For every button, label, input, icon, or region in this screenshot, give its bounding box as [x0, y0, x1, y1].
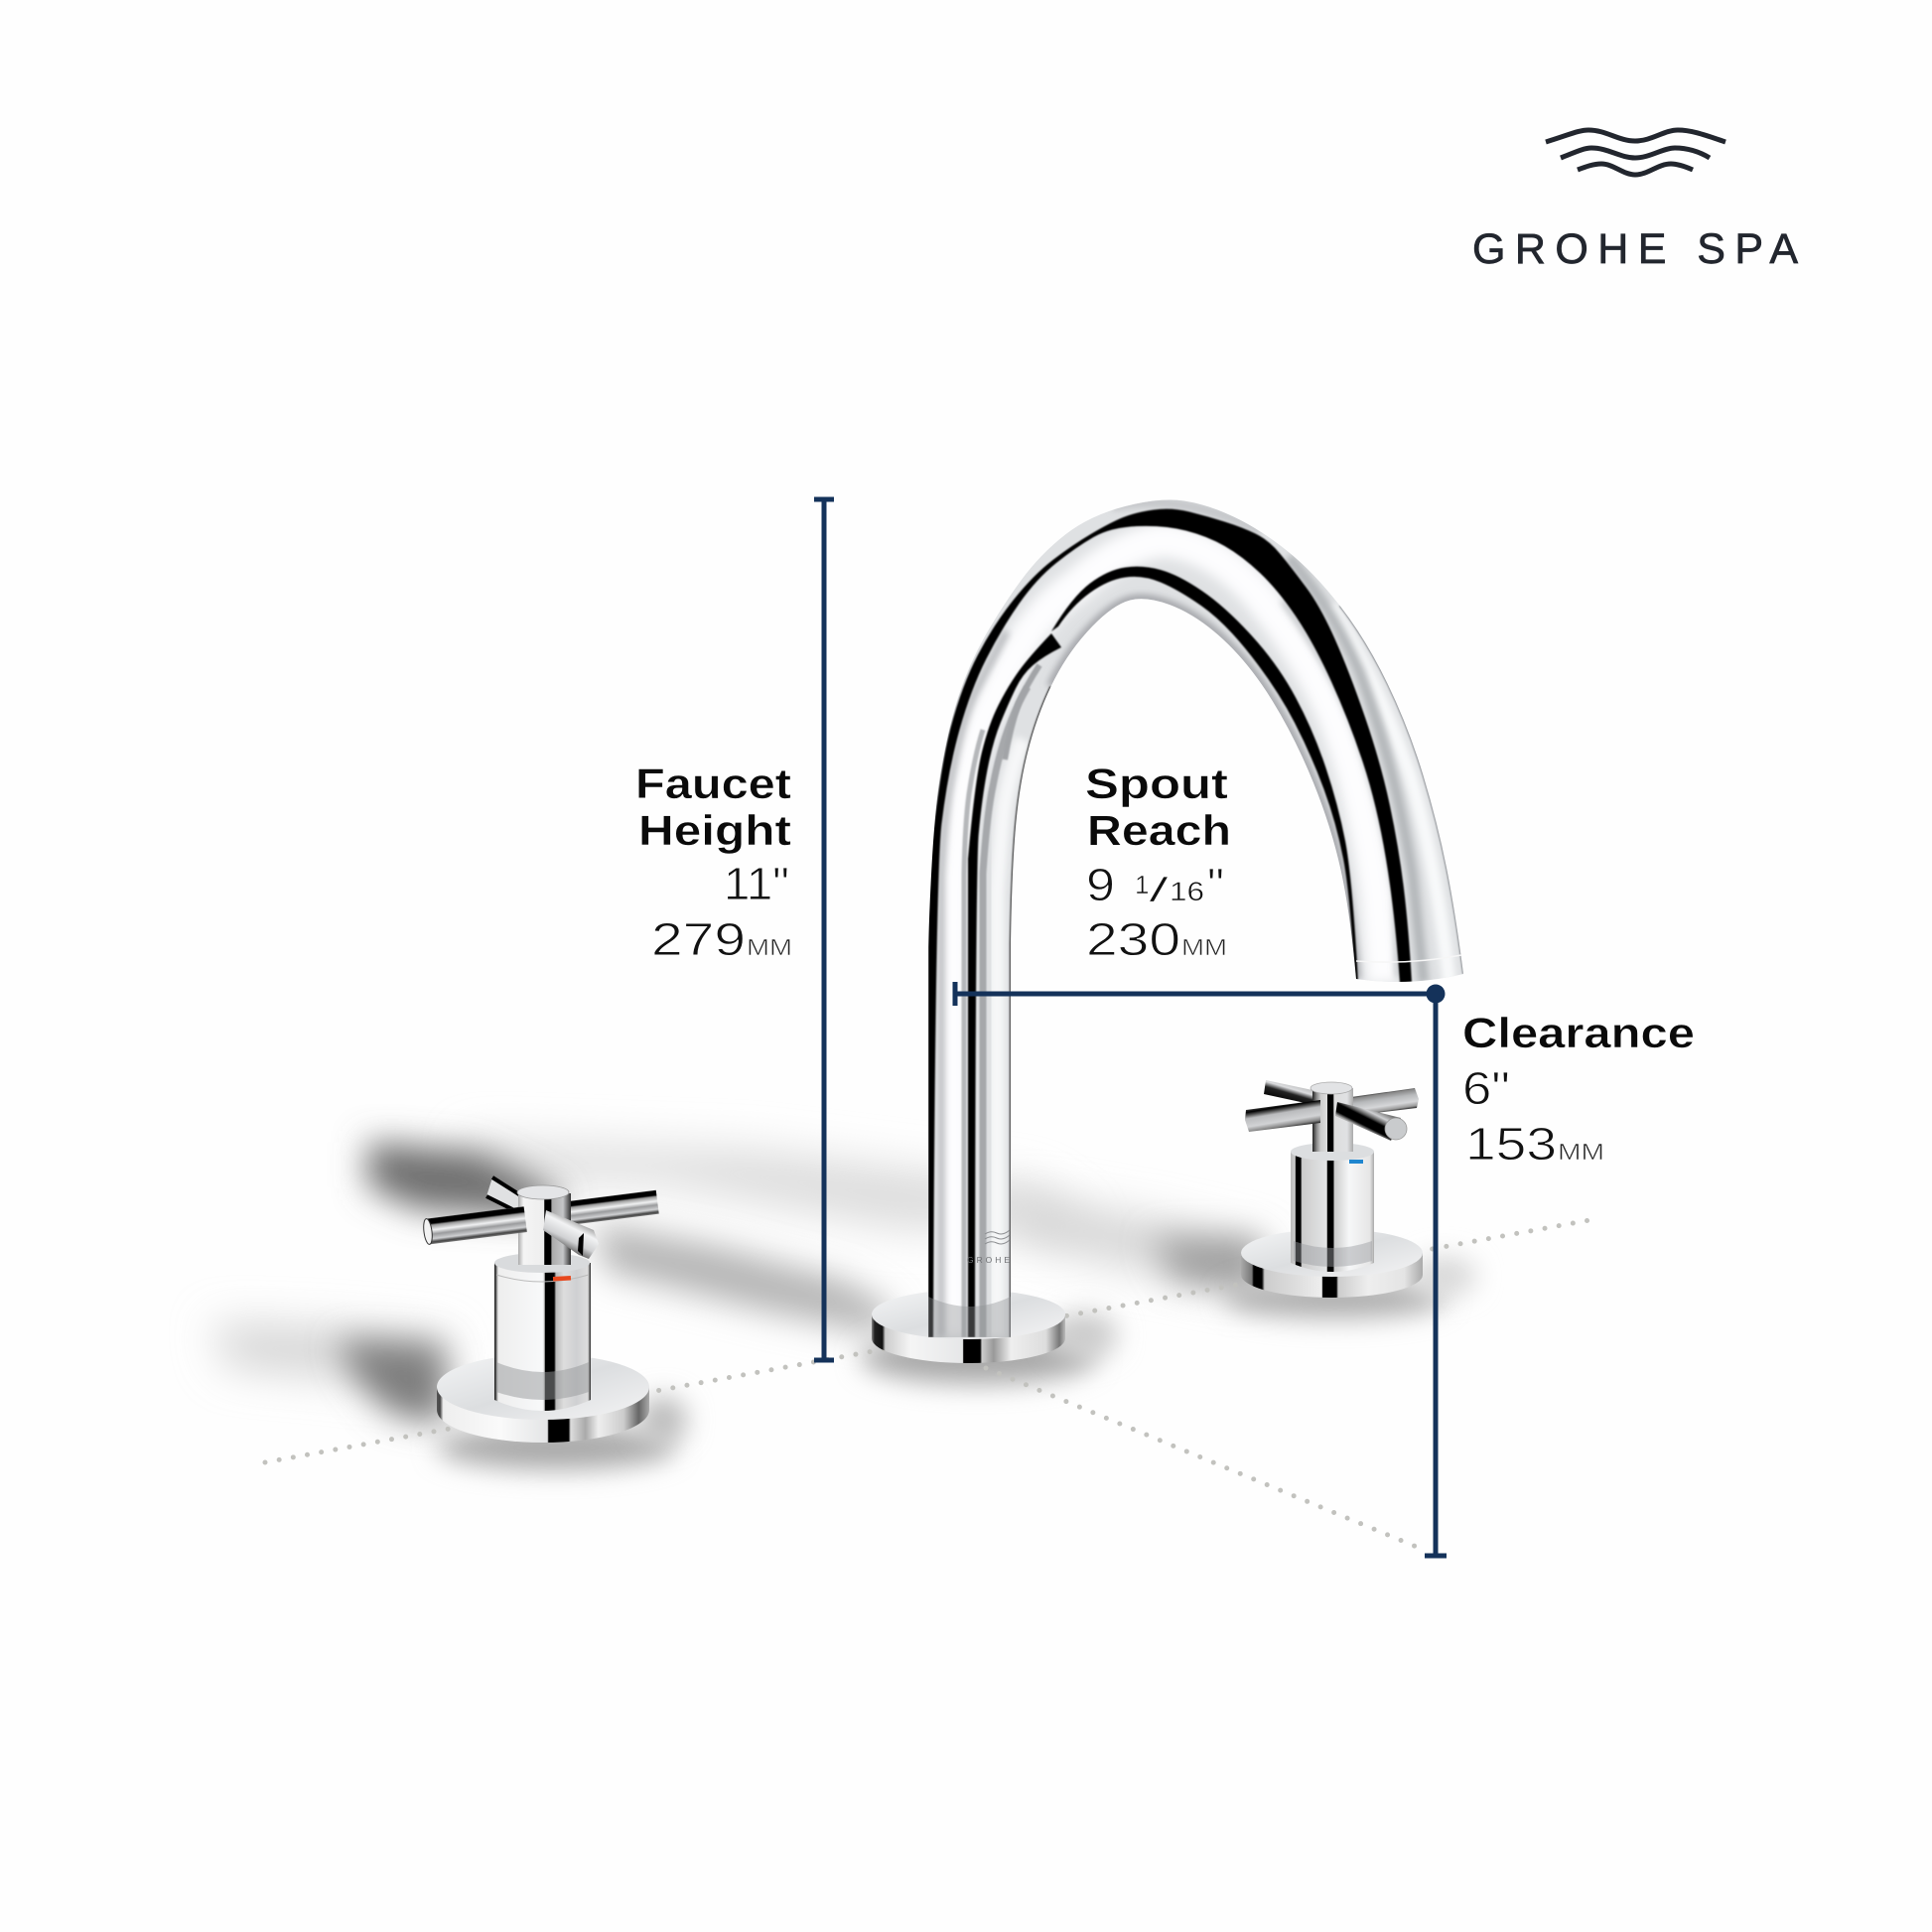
- lower reflection: [496, 1362, 589, 1400]
- label: faucet height: Faucet: [635, 760, 791, 808]
- black reflection: stem stripe: [968, 633, 1061, 1337]
- label: spout reach: 9: [1086, 859, 1115, 910]
- label: spout reach: Reach: [1087, 807, 1231, 855]
- spout tip highlight: [1356, 955, 1461, 962]
- wordmark: GROHE SPA: [1472, 225, 1798, 273]
- front arm end: [1385, 1118, 1407, 1140]
- cold marker: [1349, 1160, 1363, 1164]
- label: spout reach: 16: [1170, 877, 1204, 906]
- label: faucet height: Height: [638, 807, 791, 855]
- dimension: clearance line: [1425, 994, 1447, 1556]
- faucet spout and base: [872, 477, 1489, 1363]
- label: clearance: MM: [1558, 1139, 1604, 1165]
- black reflection: outer edge and top band: [928, 509, 1412, 1337]
- left bar: [422, 1206, 527, 1245]
- dimension dot: [1426, 985, 1446, 1003]
- label: spout reach: 230: [1086, 913, 1180, 965]
- label: spout reach: 1: [1135, 870, 1149, 899]
- lower reflection: [1294, 1241, 1372, 1267]
- front arm: [543, 1210, 599, 1259]
- logo: GROHE SPA: [1472, 130, 1798, 273]
- stem logo: small waves and name: [967, 1230, 1010, 1265]
- neck: [1312, 1088, 1353, 1152]
- label: clearance: 6": [1462, 1062, 1510, 1114]
- label: faucet height: 11": [724, 858, 789, 909]
- cap: [1311, 1082, 1352, 1094]
- label: clearance: Clearance: [1462, 1010, 1695, 1057]
- label: spout reach: MM: [1181, 934, 1227, 960]
- label: faucet height: [635, 760, 792, 965]
- back-left arm: [1264, 1080, 1314, 1105]
- back-right bar: [1351, 1088, 1419, 1116]
- label: faucet height: MM: [747, 934, 792, 960]
- dotted floor line: across the faucet row: [265, 1220, 1589, 1462]
- dotted floor line: toward clearance base: [986, 1368, 1424, 1550]
- right bar: [559, 1190, 659, 1226]
- cylinder body: [1291, 1152, 1374, 1272]
- dimension: faucet height line: [814, 499, 834, 1360]
- label: clearance: [1462, 1010, 1695, 1170]
- collar: [1291, 1143, 1374, 1161]
- dimension: spout reach line: [955, 982, 1436, 1006]
- label: clearance: 153: [1465, 1118, 1557, 1170]
- right cross handle (cold): [1241, 1080, 1423, 1298]
- engraved ring: [496, 1275, 589, 1282]
- left bar: [1245, 1100, 1320, 1132]
- hot marker: [553, 1276, 571, 1281]
- label: faucet height: 279: [651, 913, 746, 965]
- base rim: [1241, 1253, 1423, 1298]
- floor shadows: [213, 1142, 1476, 1469]
- label: spout reach: Spout: [1085, 760, 1228, 808]
- icon: three waves: [1546, 130, 1725, 175]
- black reflection: inner crescent: [1051, 567, 1358, 983]
- cap: [517, 1185, 569, 1199]
- base rim: [437, 1387, 649, 1443]
- label: spout reach: ": [1207, 859, 1224, 910]
- neck: [518, 1193, 571, 1265]
- back arm: [486, 1177, 522, 1211]
- label: spout reach: [1085, 760, 1231, 965]
- base disc rim: [872, 1314, 1065, 1363]
- base top: [437, 1354, 649, 1420]
- spout tube: [928, 500, 1463, 1337]
- front arm: [1335, 1102, 1401, 1141]
- left cross handle (hot): [422, 1177, 659, 1443]
- label: spout reach: /: [1149, 872, 1170, 909]
- stem logo: small waves and name: GROHE: [967, 1255, 1010, 1265]
- base disc top: [872, 1290, 1065, 1339]
- collar: [494, 1253, 590, 1273]
- base top: [1241, 1229, 1423, 1277]
- cylinder body: [494, 1263, 591, 1411]
- lower stem reflection: [928, 1297, 1011, 1337]
